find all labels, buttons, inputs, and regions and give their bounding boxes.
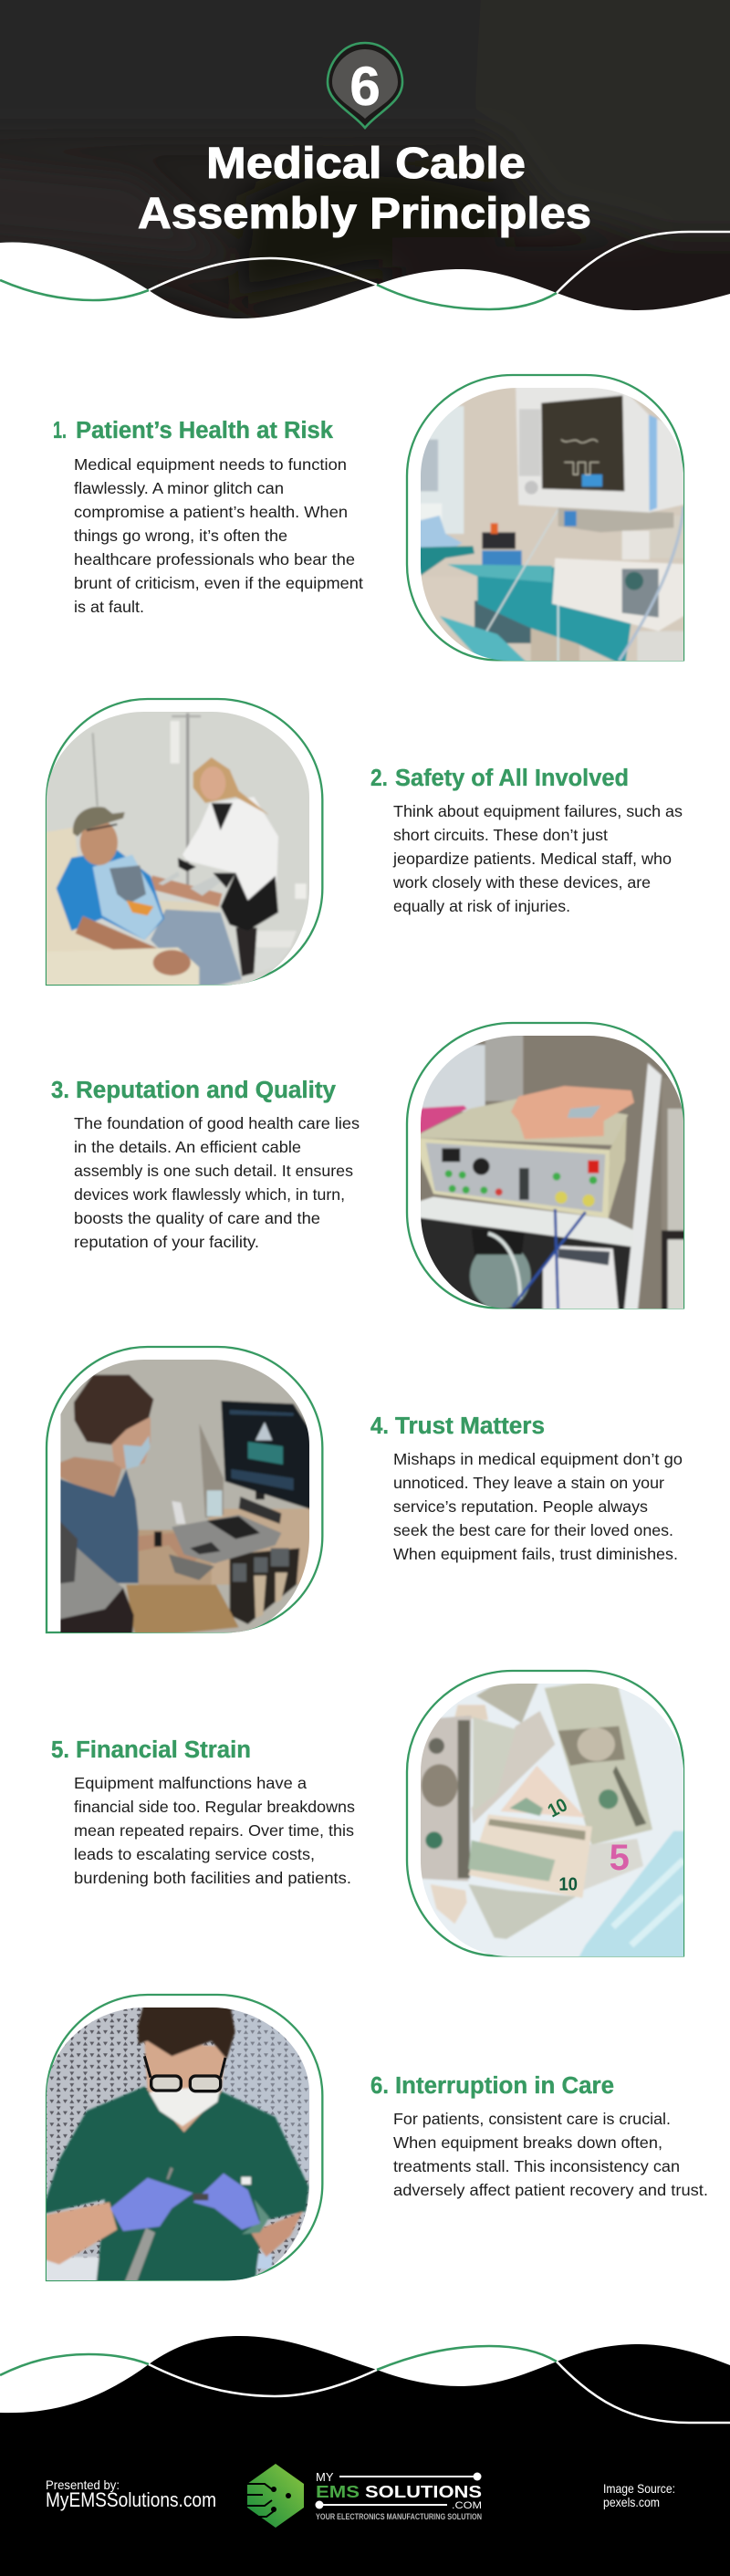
photo: ultrasound operator xyxy=(47,1347,322,1643)
body text 1: healthcare professionals who bear the xyxy=(74,550,355,568)
heading 2: 2. xyxy=(370,766,388,791)
body text 1 xyxy=(74,455,363,616)
header panel xyxy=(0,0,730,318)
title xyxy=(138,140,591,238)
body text 4: service’s reputation. People always xyxy=(393,1497,648,1516)
heading 6: 6. xyxy=(370,2073,389,2099)
presented by xyxy=(46,2477,216,2511)
footer panel xyxy=(0,2336,730,2576)
body text 2: Think about equipment failures, such as xyxy=(393,802,683,820)
body text 6 xyxy=(393,2110,708,2199)
title: Medical Cable xyxy=(206,140,526,188)
body text 1: things go wrong, it’s often the xyxy=(74,527,287,545)
photo: dollar bills and masks xyxy=(406,1671,695,1966)
panel: 6 interruption xyxy=(41,1995,708,2288)
body text 6: When equipment breaks down often, xyxy=(393,2133,662,2152)
panel: 1 patient's health xyxy=(53,375,695,671)
body text 4 xyxy=(393,1450,683,1563)
body text 3: reputation of your facility. xyxy=(74,1233,259,1251)
body text 1: brunt of criticism, even if the equipment xyxy=(74,574,363,592)
body text 5: leads to escalating service costs, xyxy=(74,1845,315,1863)
body text 1: is at fault. xyxy=(74,598,144,616)
body text 4: unnoticed. They leave a stain on your xyxy=(393,1474,664,1492)
body text 2: work closely with these devices, are xyxy=(392,873,651,892)
heading 5: 5. xyxy=(51,1737,69,1763)
body text 5: mean repeated repairs. Over time, this xyxy=(74,1821,354,1840)
body text 2 xyxy=(392,802,683,915)
photo: dollar bills and masks: 10 xyxy=(558,1874,578,1895)
icon: circuit hexagon xyxy=(247,2464,304,2528)
heading 1: Patient’s Health at Risk xyxy=(76,418,334,443)
heading 3: 3. xyxy=(51,1078,69,1103)
logo: MY xyxy=(316,2470,334,2484)
logo: SOLUTIONS xyxy=(365,2483,482,2501)
body text 4: When equipment fails, trust diminishes. xyxy=(393,1545,678,1563)
heading 3: Reputation and Quality xyxy=(76,1078,337,1103)
body text 6: For patients, consistent care is crucial. xyxy=(393,2110,671,2128)
heading 1: 1. xyxy=(53,418,67,443)
body text 5: burdening both facilities and patients. xyxy=(74,1869,351,1887)
title: Assembly Principles xyxy=(138,190,591,238)
heading 5: Financial Strain xyxy=(76,1737,251,1763)
body text 3: in the details. An efficient cable xyxy=(74,1138,301,1156)
body text 1: compromise a patient’s health. When xyxy=(74,503,348,521)
body text 6: adversely affect patient recovery and trust. xyxy=(393,2181,708,2199)
photo: dollar bills and masks: 5 xyxy=(610,1838,630,1878)
panel: 3 reputation xyxy=(51,1023,695,1319)
body text 2: short circuits. These don’t just xyxy=(393,826,608,844)
heading 2: Safety of All Involved xyxy=(395,766,629,791)
photo: masked technician in green scrubs xyxy=(41,1995,322,2288)
body text 3: The foundation of good health care lies xyxy=(74,1114,360,1132)
photo: doctor with patient xyxy=(35,699,324,995)
body text 3: assembly is one such detail. It ensures xyxy=(74,1162,353,1180)
body text 4: Mishaps in medical equipment don’t go xyxy=(393,1450,683,1468)
panel: 5 financial xyxy=(51,1671,695,1966)
header background photo xyxy=(0,0,730,318)
image source xyxy=(603,2481,675,2509)
body text 3: boosts the quality of care and the xyxy=(74,1209,320,1227)
logo: EMS xyxy=(316,2483,360,2501)
photo: dollar bills and masks: 10 xyxy=(545,1794,571,1821)
body text 4: seek the best care for their loved ones. xyxy=(393,1521,673,1539)
body text 2: equally at risk of injuries. xyxy=(393,897,570,915)
image source: pexels.com xyxy=(603,2495,660,2509)
body text 1: flawlessly. A minor glitch can xyxy=(74,479,284,497)
heading 4: Trust Matters xyxy=(395,1413,545,1439)
body text 2: jeopardize patients. Medical staff, who xyxy=(392,850,672,868)
photo: patient monitor xyxy=(406,375,695,671)
badge: number 6 pin: 6 xyxy=(349,56,381,117)
panel: 4 trust xyxy=(47,1347,683,1643)
logo: YOUR ELECTRONICS MANUFACTURING SOLUTION xyxy=(316,2512,482,2521)
body text 3: devices work flawlessly which, in turn, xyxy=(74,1185,345,1204)
body text 5 xyxy=(74,1774,355,1887)
body text 5: Equipment malfunctions have a xyxy=(74,1774,307,1792)
presented by: MyEMSSolutions.com xyxy=(46,2488,216,2511)
footer wave xyxy=(0,2336,730,2576)
body text 5: financial side too. Regular breakdowns xyxy=(74,1798,355,1816)
body text 6: treatments stall. This inconsistency can xyxy=(393,2157,680,2175)
heading 4: 4. xyxy=(370,1413,389,1439)
badge: number 6 pin xyxy=(328,43,402,128)
presented by: Presented by: xyxy=(46,2477,120,2492)
logo xyxy=(247,2464,482,2528)
image source: Image Source: xyxy=(603,2481,675,2496)
body text 1: Medical equipment needs to function xyxy=(74,455,347,474)
photo: medical device xyxy=(406,1023,695,1319)
logo: .COM xyxy=(452,2500,482,2511)
header wave xyxy=(0,232,730,330)
panel: 2 safety xyxy=(35,699,683,995)
body text 3 xyxy=(74,1114,360,1251)
heading 6: Interruption in Care xyxy=(395,2073,614,2099)
